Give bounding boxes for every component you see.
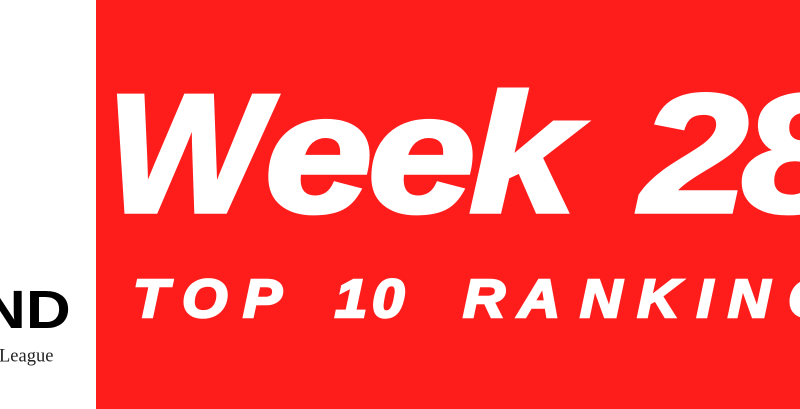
title: W <box>107 60 278 248</box>
panel: white logo area <box>0 0 96 409</box>
logo subtitle: League <box>0 346 53 366</box>
